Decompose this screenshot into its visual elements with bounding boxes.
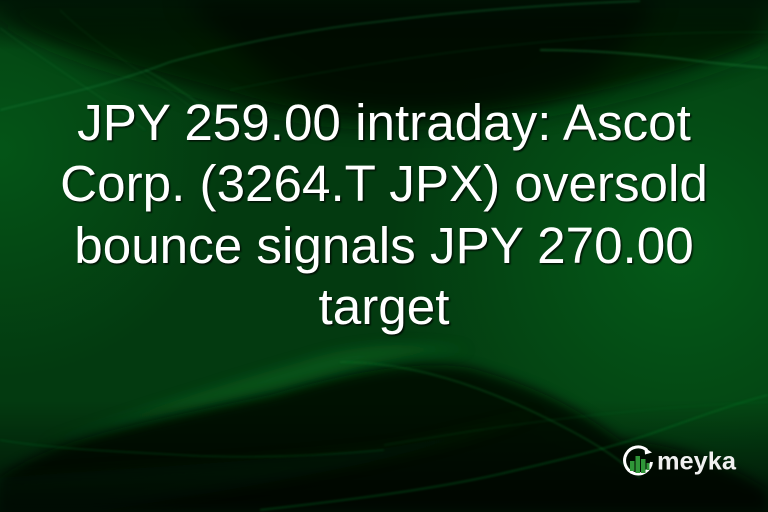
- wordmark: meyka: [657, 448, 737, 476]
- title: target: [319, 278, 449, 335]
- title: JPY 259.00 intraday: Ascot: [77, 94, 691, 151]
- title: Corp. (3264.T JPX) oversold: [60, 155, 708, 212]
- logo: meyka: [623, 445, 737, 476]
- title: bounce signals JPY 270.00: [74, 217, 694, 274]
- title: [60, 94, 708, 336]
- icon: ring with bars: [625, 447, 652, 474]
